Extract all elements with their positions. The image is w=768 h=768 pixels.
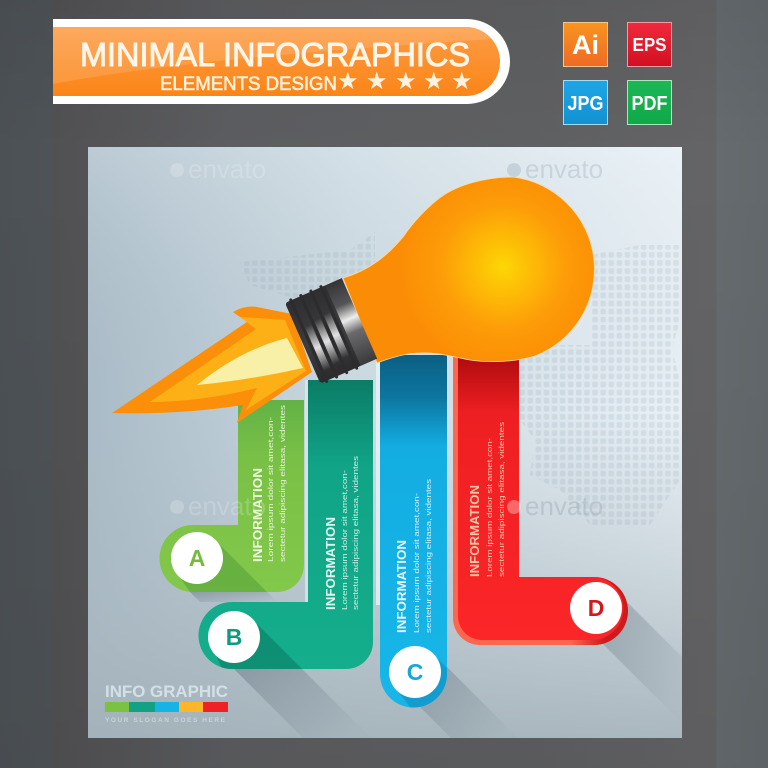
- strip A shape: [159, 400, 304, 592]
- badge D: [570, 582, 622, 634]
- strip B text line 1: Lorem ipsum dolor sit amet,con-: [340, 469, 349, 610]
- info graphic logo: [105, 682, 228, 724]
- watermark top right: [507, 161, 602, 178]
- watermark bottom right: [507, 498, 602, 516]
- logo colour bar: [105, 702, 228, 712]
- strip A text line 2: sectetur adipiscing elitasa, videntes: [278, 405, 287, 562]
- strip C shape: [380, 355, 447, 707]
- watermark top right: envato: [525, 154, 603, 184]
- badge A: A: [189, 545, 205, 571]
- strip C heading: INFORMATION: [395, 540, 409, 633]
- strip B heading: INFORMATION: [324, 517, 338, 610]
- badge A: [171, 532, 223, 584]
- strip B: teal: [198, 380, 373, 669]
- watermark bottom left: [170, 498, 265, 516]
- watermark top left: envato: [188, 154, 266, 184]
- long shadows on panel: [190, 592, 682, 738]
- flame outer: [112, 307, 312, 423]
- strip C inner shadow: [399, 658, 447, 708]
- strip C text line 2: sectetur adipiscing elitasa, videntes: [424, 479, 433, 633]
- strip B text line 2: sectetur adipiscing elitasa, videntes: [351, 456, 360, 610]
- banner white frame: [53, 19, 510, 104]
- banner title: MINIMAL INFOGRAPHICS: [80, 36, 470, 73]
- strip C text line 1: Lorem ipsum dolor sit amet,con-: [412, 492, 421, 633]
- strip D shape: [458, 355, 624, 640]
- strip A: green: [159, 400, 304, 592]
- bulb glass: [343, 177, 594, 363]
- badge B: [208, 611, 260, 663]
- title banner: [53, 19, 510, 104]
- badge: EPS: EPS: [632, 35, 666, 55]
- watermark top left: [170, 162, 265, 178]
- strip B inner shadow: [216, 619, 302, 669]
- logo slogan: YOUR SLOGAN GOES HERE: [105, 717, 226, 724]
- strip D: red: [453, 355, 628, 645]
- banner gloss: [53, 27, 492, 84]
- main panel: [88, 147, 682, 738]
- badge C: [389, 646, 441, 698]
- bulb screw cap: [284, 276, 378, 385]
- strip B light edge: [305, 380, 308, 602]
- badge: JPG: JPG: [568, 93, 604, 115]
- flame middle: [150, 317, 306, 410]
- badge: PDF: PDF: [632, 93, 668, 115]
- watermark bottom right: envato: [525, 491, 603, 521]
- strip D rim: [453, 355, 628, 645]
- watermark bottom left: envato: [188, 491, 266, 521]
- strip C light edge: [376, 355, 380, 605]
- strip D dark right rim: [570, 577, 628, 645]
- banner subtitle: ELEMENTS DESIGN: [160, 74, 337, 95]
- strip A heading: INFORMATION: [251, 468, 265, 562]
- light bulb: [284, 177, 594, 385]
- strip C: blue: [376, 355, 447, 708]
- badge: Ai: Ai: [572, 30, 599, 60]
- badge D: D: [588, 595, 604, 621]
- rating stars: ★★★★★: [337, 67, 473, 95]
- format badges: [564, 22, 672, 124]
- strip B shape: [198, 380, 373, 669]
- dotted world map: [240, 232, 680, 525]
- logo title: INFO GRAPHIC: [105, 682, 228, 701]
- flame core: [197, 338, 303, 385]
- strip A inner shadow: [179, 540, 267, 592]
- badge B: B: [226, 624, 242, 650]
- panel background: [88, 147, 682, 738]
- strip D heading: INFORMATION: [468, 485, 482, 577]
- banner orange fill: [53, 27, 500, 96]
- strip D text line 1: Lorem ipsum dolor sit amet,con-: [485, 437, 494, 577]
- strip A text line 1: Lorem ipsum dolor sit amet,con-: [266, 416, 275, 562]
- strip D text line 2: sectetur adipiscing elitasa, videntes: [497, 422, 506, 577]
- badge C: C: [407, 659, 423, 685]
- rocket flame: [112, 307, 312, 423]
